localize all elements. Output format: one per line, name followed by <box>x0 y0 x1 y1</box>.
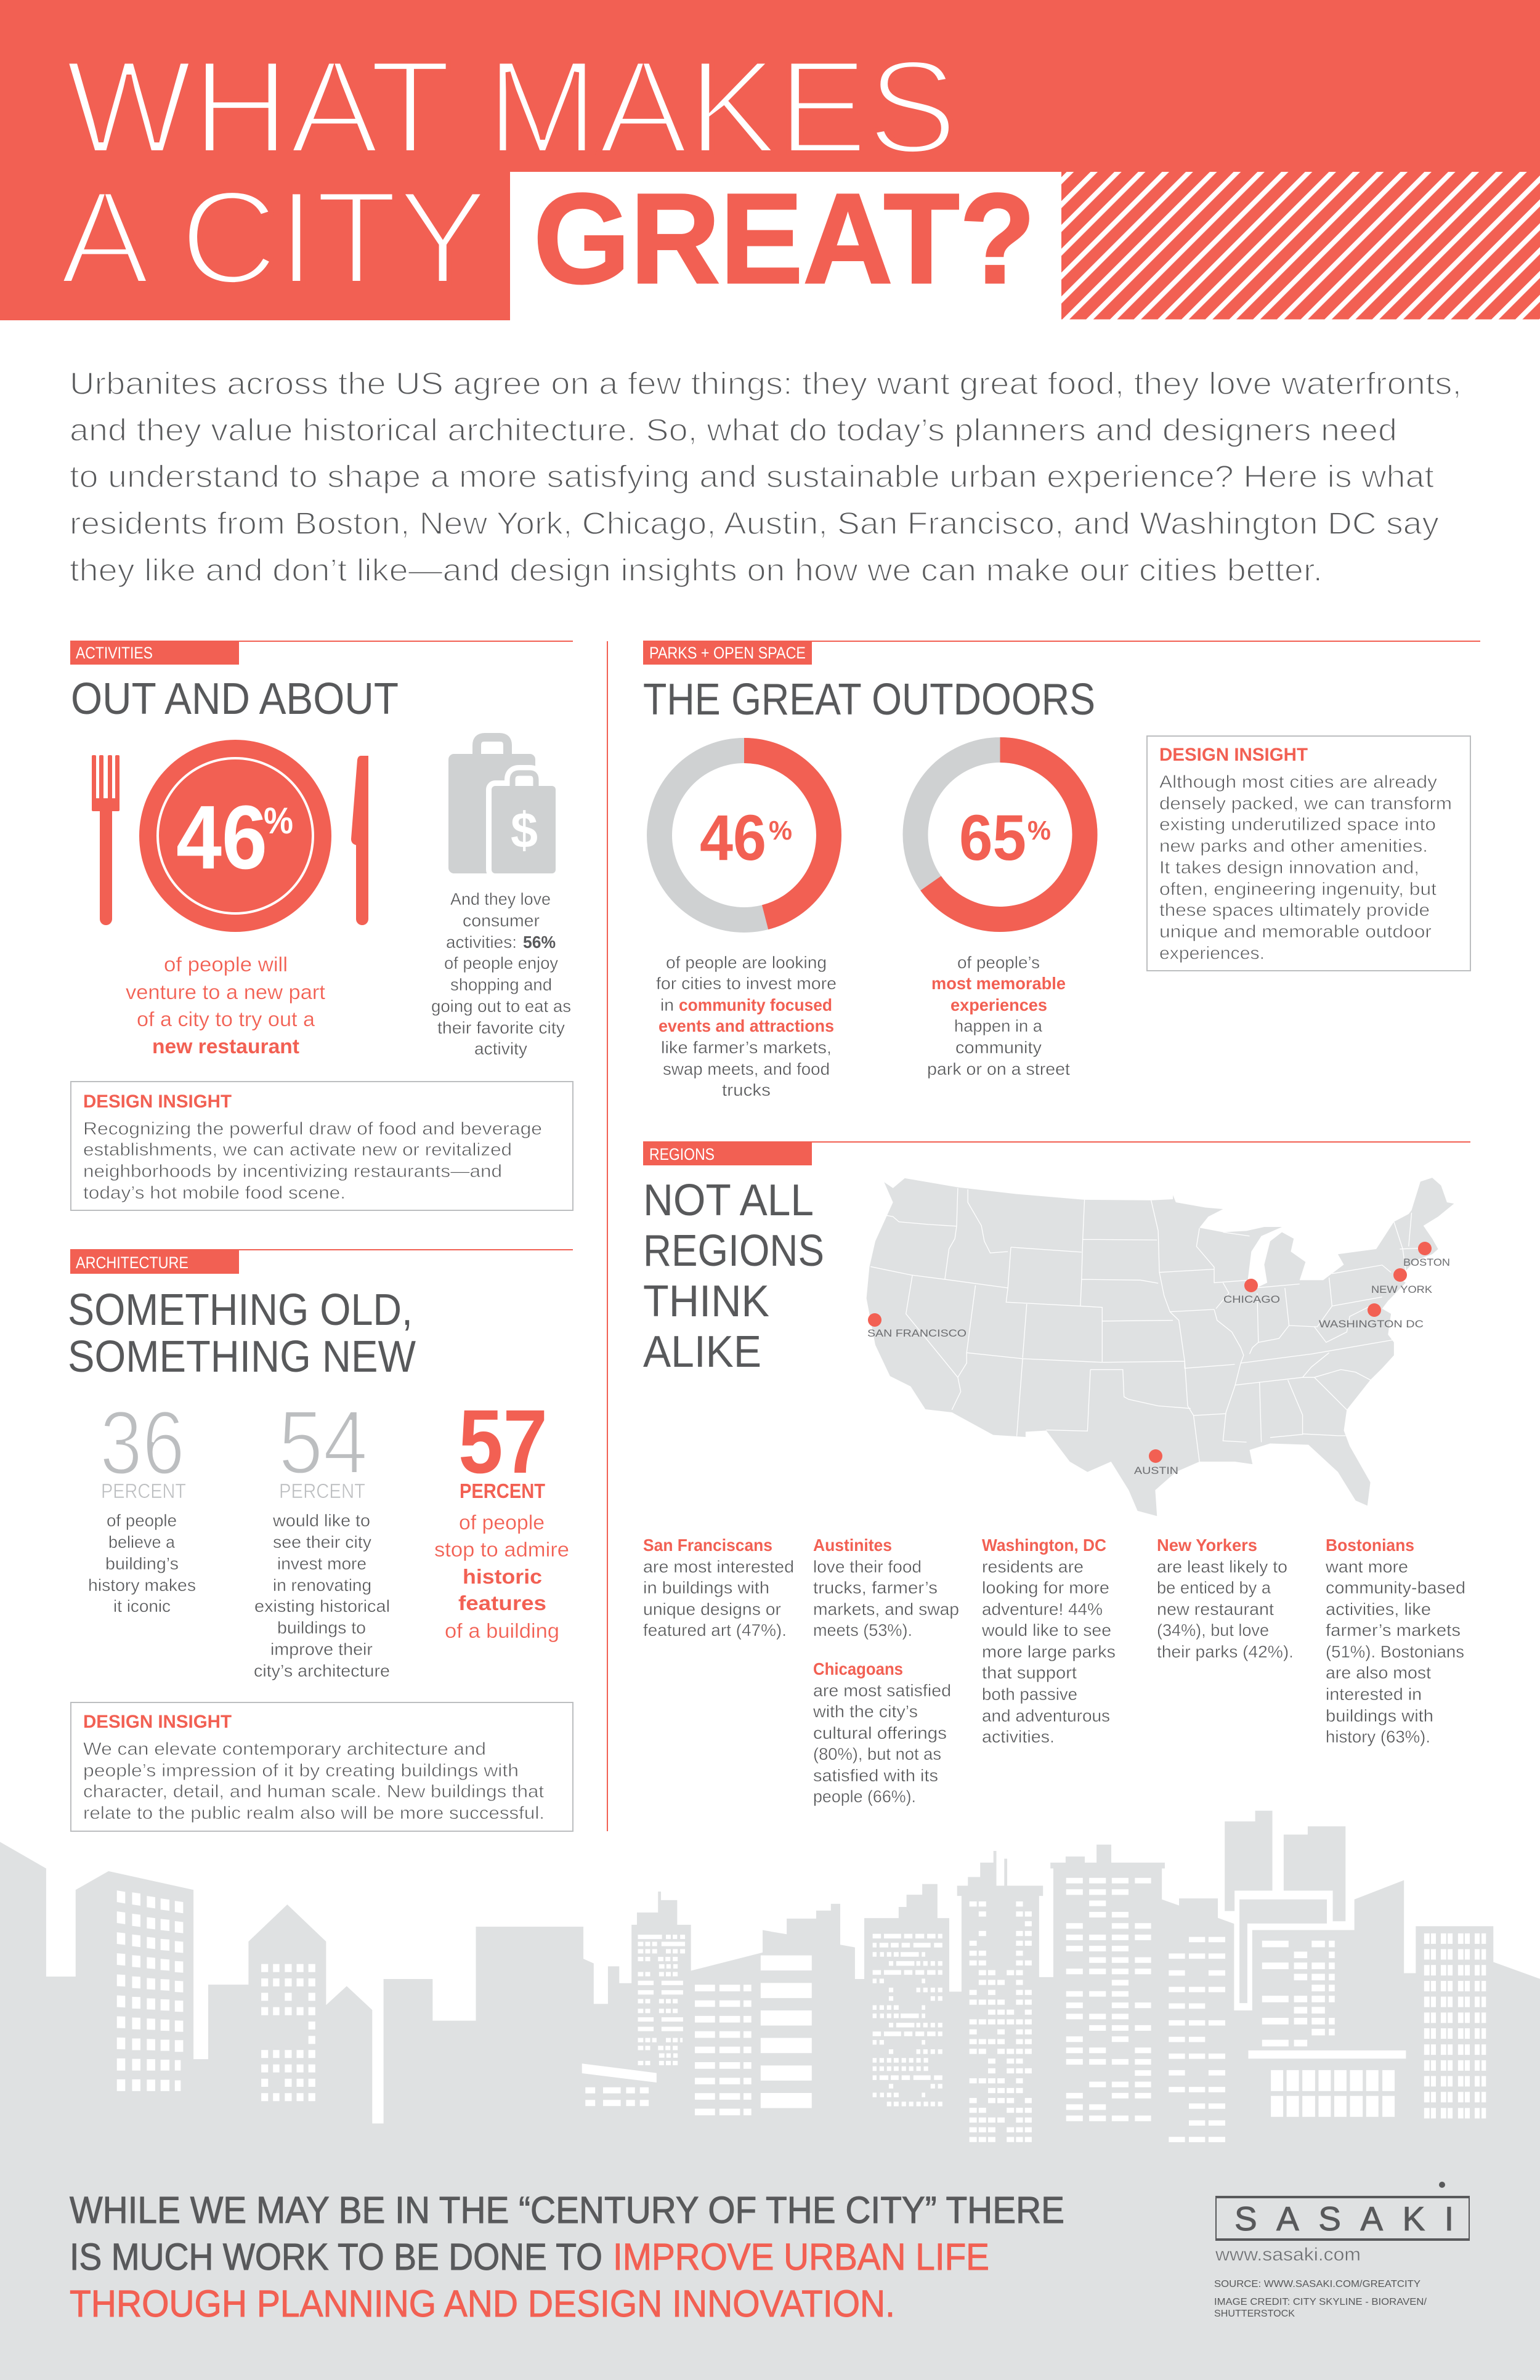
title line one: WHAT MAKES <box>65 32 957 181</box>
statistic: 54 percent: 54 <box>278 1392 368 1493</box>
callout: design insight parks: new parks and other amenities. <box>1159 836 1428 856</box>
closing statement: IS MUCH WORK TO BE DONE TO <box>70 2236 602 2278</box>
text: bostonians: community-based <box>1326 1578 1465 1597</box>
text: consumer activities statistic: consumer <box>463 911 540 930</box>
text: community focused events: events and attractions <box>659 1016 834 1035</box>
statistic: 36 percent: PERCENT <box>101 1479 186 1502</box>
statistic: 54 percent: see their city <box>273 1532 371 1552</box>
callout: design insight parks: DESIGN INSIGHT <box>1159 745 1308 765</box>
map pins and city labels: WASHINGTON DC <box>1319 1319 1424 1330</box>
text: washington dc: Washington, DC <box>982 1536 1106 1555</box>
text: bostonians: want more <box>1325 1557 1408 1576</box>
callout: design insight architecture: people’s impression of it by creating buildings with <box>83 1761 519 1781</box>
text: consumer activities statistic: shopping and <box>450 975 552 994</box>
text: consumer activities statistic: And they love <box>450 889 551 909</box>
text: bostonians: farmer’s markets <box>1326 1621 1461 1640</box>
callout: design insight parks: densely packed, we can transform <box>1159 794 1452 814</box>
callout: design insight parks: Although most cities are already <box>1159 772 1438 792</box>
header banner <box>0 0 1540 320</box>
text: new yorkers: New Yorkers <box>1157 1536 1257 1555</box>
text: san franciscans: unique designs or <box>643 1600 781 1619</box>
icon: shopping bags: $ <box>511 803 538 859</box>
text: washington dc: looking for more <box>982 1578 1109 1597</box>
statistic: 54 percent: invest more <box>277 1554 367 1573</box>
statistic: 54 percent: PERCENT <box>279 1479 365 1502</box>
heading: not all regions think alike: NOT ALL <box>643 1176 814 1225</box>
section tag: parks + open space: PARKS + OPEN SPACE <box>649 644 806 662</box>
text: most memorable experiences: community <box>955 1038 1042 1057</box>
statistic: 36 percent: it iconic <box>113 1597 171 1616</box>
text: chicagoans: with the city’s <box>813 1702 918 1721</box>
text: community focused events <box>656 953 837 1099</box>
heading: not all regions think alike: REGIONS <box>643 1226 824 1276</box>
map: united states <box>867 1178 1454 1516</box>
text: bostonians <box>1325 1536 1465 1746</box>
text: bostonians: interested in <box>1326 1685 1422 1704</box>
intro paragraph: to understand to shape a more satisfying and sustainable urban experience? Here is what <box>70 459 1434 494</box>
text: washington dc: more large parks <box>982 1642 1116 1661</box>
panel: parks and open space <box>643 641 1480 1099</box>
callout: design insight food: today’s hot mobile food scene. <box>83 1183 346 1203</box>
statistic: 57 percent: of a building <box>445 1619 559 1642</box>
title line two: A CITY <box>60 163 488 312</box>
map pins and city labels: NEW YORK <box>1371 1284 1432 1295</box>
statistic: 57 percent <box>434 1391 569 1642</box>
icon: knife <box>351 756 368 925</box>
callout: design insight parks: experiences. <box>1159 944 1265 963</box>
text: new yorkers: (34%), but love <box>1157 1621 1269 1640</box>
intro paragraph: residents from Boston, New York, Chicago, Austin, San Francisco, and Washington DC say <box>70 506 1440 541</box>
text: new yorkers: new restaurant <box>1157 1600 1274 1619</box>
icon: shopping bags <box>448 737 556 873</box>
donut chart: 46 percent <box>659 750 829 920</box>
text: austinites: love their food <box>813 1557 922 1576</box>
text: washington dc: adventure! 44% <box>982 1600 1103 1619</box>
heading: not all regions think alike <box>643 1176 824 1377</box>
logo: sasaki: SASAKI <box>1234 2200 1454 2238</box>
statistic: 54 percent: in renovating <box>273 1576 371 1595</box>
closing statement: IMPROVE URBAN LIFE <box>613 2236 989 2278</box>
text: community focused events: of people are looking <box>666 953 827 972</box>
website and credits: SHUTTERSTOCK <box>1214 2309 1295 2319</box>
text: most memorable experiences: happen in a <box>954 1016 1042 1035</box>
text: new yorkers: are least likely to <box>1157 1557 1287 1576</box>
section tag: regions <box>643 1142 812 1165</box>
closing statement: WHILE WE MAY BE IN THE “CENTURY OF THE CITY” THERE <box>70 2189 1064 2231</box>
text: consumer activities statistic: of people enjoy <box>444 953 558 973</box>
callout: design insight parks <box>1147 736 1470 971</box>
statistic: 54 percent: improve their <box>270 1640 373 1659</box>
statistic: 57 percent: historic <box>463 1565 542 1588</box>
intro paragraph: they like and don’t like—and design insights on how we can make our cities better. <box>70 552 1323 588</box>
callout: design insight food: establishments, we can activate new or revitalized <box>83 1140 512 1160</box>
text: bostonians: activities, like <box>1326 1600 1431 1619</box>
callout: design insight food: DESIGN INSIGHT <box>83 1091 232 1112</box>
text: bostonians: Bostonians <box>1326 1536 1414 1555</box>
section tag: activities: ACTIVITIES <box>76 644 153 662</box>
icon: plate with 46 percent: 46 <box>176 787 267 888</box>
statistic: 57 percent: features <box>458 1592 546 1614</box>
callout: design insight parks: often, engineering ingenuity, but <box>1159 880 1437 899</box>
text: new yorkers: their parks (42%). <box>1157 1642 1294 1661</box>
callout: design insight parks: It takes design innovation and, <box>1159 858 1419 878</box>
title emphasis: GREAT? <box>533 168 1035 310</box>
callout: design insight architecture: DESIGN INSIGHT <box>83 1712 232 1732</box>
text: san franciscans: featured art (47%). <box>643 1621 787 1640</box>
map pins and city labels: SAN FRANCISCO <box>867 1328 967 1339</box>
statistic: 54 percent: buildings to <box>277 1618 366 1637</box>
text: restaurant statistic: venture to a new part <box>126 981 325 1003</box>
text: community focused events: in <box>660 995 674 1014</box>
statistic: 36 percent: of people <box>107 1511 177 1530</box>
icon: plate with 46 percent <box>139 740 331 932</box>
text: washington dc: both passive <box>982 1685 1077 1704</box>
text: most memorable experiences: of people’s <box>957 953 1040 972</box>
closing statement: THROUGH PLANNING AND DESIGN INNOVATION. <box>70 2283 895 2325</box>
text: chicagoans: are most satisfied <box>813 1681 951 1700</box>
donut chart: 65 percent: % <box>1027 816 1051 846</box>
text: bostonians: buildings with <box>1326 1706 1433 1725</box>
statistic: 36 percent: history makes <box>88 1576 196 1595</box>
statistic: 57 percent: 57 <box>458 1391 548 1492</box>
donut chart: 65 percent: 65 <box>959 802 1026 874</box>
text: san franciscans: in buildings with <box>643 1578 769 1597</box>
text: austinites: Austinites <box>813 1536 892 1555</box>
text: community focused events: swap meets, and food <box>663 1059 830 1079</box>
website and credits: IMAGE CREDIT: CITY SKYLINE - BIORAVEN/ <box>1214 2297 1427 2307</box>
heading: the great outdoors: THE GREAT OUTDOORS <box>643 675 1095 724</box>
donut chart: 46 percent: 46 <box>700 802 766 874</box>
text: community focused events: like farmer’s markets, <box>661 1038 832 1057</box>
text: most memorable experiences: experiences <box>950 995 1047 1014</box>
statistic: 57 percent: of people <box>459 1511 545 1534</box>
intro paragraph: Urbanites across the US agree on a few things: they want great food, they love waterfronts, <box>70 366 1462 401</box>
statistic: 54 percent: city’s architecture <box>254 1661 390 1680</box>
text: community focused events: community focused <box>679 995 832 1014</box>
section tag: regions: REGIONS <box>649 1145 715 1164</box>
section tag: activities <box>70 641 239 665</box>
intro paragraph <box>70 366 1462 588</box>
text: san franciscans: San Franciscans <box>643 1536 772 1555</box>
website and credits: SOURCE: WWW.SASAKI.COM/GREATCITY <box>1214 2279 1420 2289</box>
callout: design insight parks: these spaces ultimately provide <box>1159 901 1430 920</box>
skyline left half <box>0 1842 771 2380</box>
city skyline <box>0 1811 1540 2380</box>
text: san franciscans <box>643 1536 794 1640</box>
text: most memorable experiences <box>927 953 1070 1079</box>
map pins and city labels: CHICAGO <box>1223 1294 1280 1305</box>
text: new yorkers: be enticed by a <box>1157 1578 1271 1597</box>
panel: regions <box>643 1141 1470 1806</box>
callout: design insight food <box>71 1082 573 1210</box>
callout: design insight parks: unique and memorable outdoor <box>1159 922 1432 942</box>
statistic: 57 percent: PERCENT <box>460 1479 545 1502</box>
text: chicagoans: cultural offerings <box>813 1723 947 1742</box>
text: washington dc: activities. <box>982 1727 1055 1746</box>
text: restaurant statistic: new restaurant <box>152 1035 299 1058</box>
text: austinites: markets, and swap <box>813 1600 959 1619</box>
text: most memorable experiences: park or on a street <box>927 1059 1070 1079</box>
logo: sasaki <box>1215 2182 1470 2241</box>
text: chicagoans: people (66%). <box>813 1787 916 1806</box>
statistic: 54 percent: would like to <box>272 1511 370 1530</box>
text: most memorable experiences: most memorable <box>931 974 1066 993</box>
statistic: 54 percent: existing historical <box>254 1597 390 1616</box>
callout: design insight architecture: relate to the public realm also will be more successful. <box>83 1803 545 1823</box>
text: consumer activities statistic: going out to eat as <box>431 997 571 1016</box>
callout: design insight architecture <box>71 1702 573 1831</box>
text: restaurant statistic <box>126 953 325 1058</box>
statistic: 36 percent: 36 <box>100 1393 185 1494</box>
text: bostonians: history (63%). <box>1326 1727 1430 1746</box>
map pins and city labels: BOSTON <box>1403 1257 1450 1268</box>
statistic: 36 percent: building’s <box>105 1554 179 1573</box>
heading: something old, something new: SOMETHING OLD, <box>68 1285 413 1335</box>
text: austinites: trucks, farmer’s <box>813 1578 938 1597</box>
text: bostonians: are also most <box>1326 1663 1431 1682</box>
callout: design insight architecture: We can elevate contemporary architecture and <box>83 1739 486 1759</box>
text: washington dc: would like to see <box>981 1621 1111 1640</box>
statistic: 57 percent: stop to admire <box>434 1538 569 1561</box>
callout: design insight food: neighborhoods by incentivizing restaurants—and <box>83 1162 502 1181</box>
text: washington dc <box>981 1536 1116 1746</box>
callout: design insight architecture: character, detail, and human scale. New buildings that <box>83 1782 544 1802</box>
text: consumer activities statistic: activities: <box>446 933 517 952</box>
text: chicagoans: Chicagoans <box>813 1659 903 1678</box>
heading: something old, something new: SOMETHING NEW <box>68 1332 416 1382</box>
text: austinites: meets (53%). <box>813 1621 912 1640</box>
text: bostonians: (51%). Bostonians <box>1326 1642 1464 1661</box>
text: austinites <box>813 1536 959 1640</box>
text: washington dc: and adventurous <box>982 1706 1110 1725</box>
text: community focused events: trucks <box>722 1080 771 1099</box>
text: consumer activities statistic <box>431 889 571 1058</box>
section tag: architecture: ARCHITECTURE <box>76 1253 188 1272</box>
donut chart: 65 percent <box>915 750 1085 919</box>
intro paragraph: and they value historical architecture. So, what do today’s planners and designers need <box>70 413 1397 447</box>
closing statement <box>70 2189 1064 2325</box>
heading: not all regions think alike: THINK <box>643 1277 769 1326</box>
statistic: 54 percent <box>254 1392 390 1680</box>
statistic: 36 percent <box>88 1393 196 1616</box>
text: chicagoans: satisfied with its <box>813 1766 938 1785</box>
heading: not all regions think alike: ALIKE <box>643 1327 761 1377</box>
text: consumer activities statistic: activity <box>474 1039 527 1058</box>
icon: plate with 46 percent: % <box>264 800 293 841</box>
text: community focused events: for cities to invest more <box>656 974 837 993</box>
center divider <box>607 641 608 1831</box>
section tag: architecture <box>70 1250 239 1274</box>
text: chicagoans: (80%), but not as <box>813 1744 941 1763</box>
callout: design insight food: Recognizing the powerful draw of food and beverage <box>83 1119 542 1139</box>
map pins and city labels: AUSTIN <box>1134 1465 1178 1476</box>
map pins and city labels <box>867 1242 1450 1476</box>
icon: fork <box>92 755 120 925</box>
text: consumer activities statistic: their favorite city <box>437 1018 565 1037</box>
heading: something old, something new <box>68 1285 416 1382</box>
text: san franciscans: are most interested <box>643 1557 794 1576</box>
callout: design insight parks: existing underutilized space into <box>1159 815 1436 835</box>
donut chart: 46 percent: % <box>769 816 792 846</box>
panel: activities <box>70 641 573 1210</box>
website and credits: www.sasaki.com <box>1215 2244 1361 2265</box>
statistic: 36 percent: believe a <box>108 1532 175 1552</box>
text: chicagoans <box>813 1659 951 1806</box>
text: washington dc: that support <box>982 1663 1077 1682</box>
heading: out and about: OUT AND ABOUT <box>71 674 399 724</box>
panel: architecture <box>68 1249 573 1831</box>
text: consumer activities statistic: 56% <box>523 933 556 952</box>
text: restaurant statistic: of people will <box>164 953 288 976</box>
text: washington dc: residents are <box>982 1557 1084 1576</box>
text: restaurant statistic: of a city to try out a <box>137 1008 315 1030</box>
skyline right half <box>761 1811 1540 2380</box>
website and credits <box>1214 2244 1427 2319</box>
text: new yorkers <box>1157 1536 1294 1661</box>
